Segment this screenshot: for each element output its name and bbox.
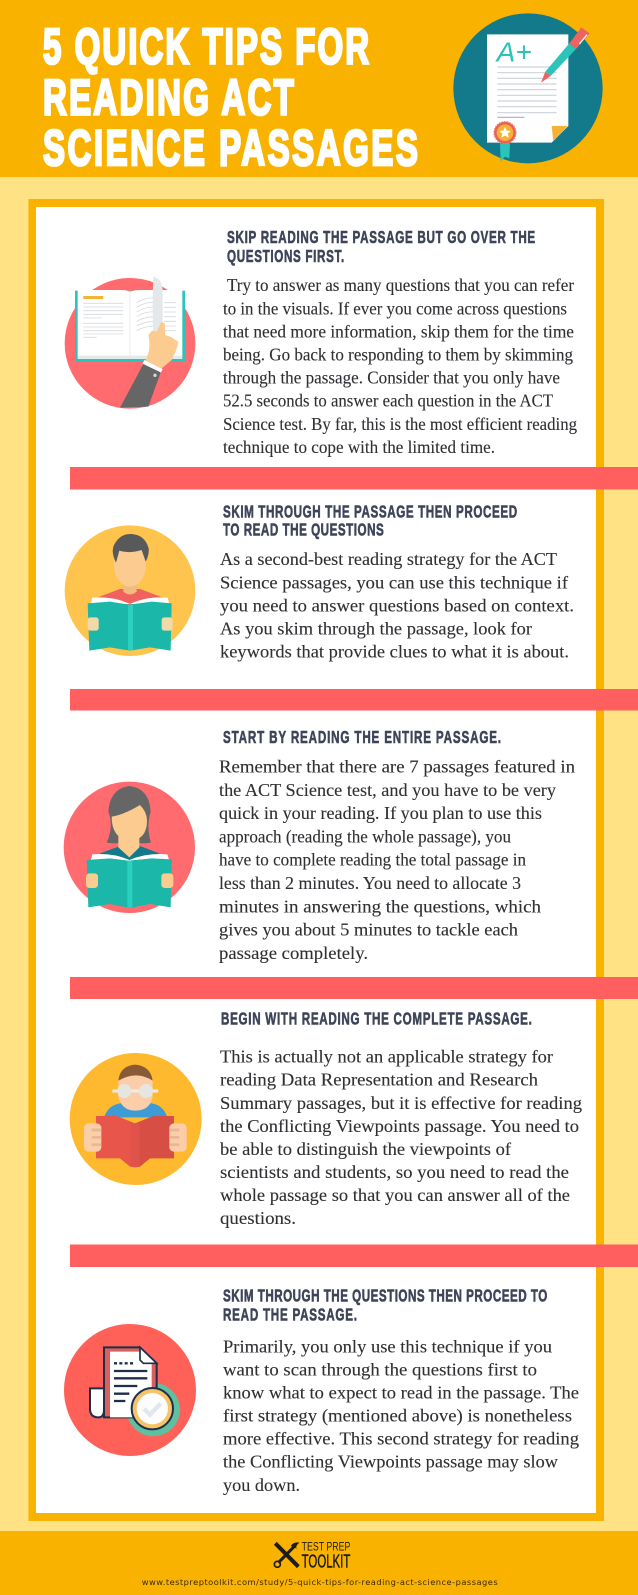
text block: that need more information, skip them for the time bbox=[223, 321, 574, 341]
title bbox=[43, 19, 418, 176]
text block bbox=[219, 756, 575, 963]
title: 5 QUICK TIPS FOR bbox=[43, 19, 369, 74]
panel: tip 3 bbox=[64, 729, 575, 963]
icon: open book with hand bbox=[65, 277, 195, 409]
text block: less than 2 minutes. You need to allocate 3 bbox=[219, 873, 521, 893]
title: SCIENCE PASSAGES bbox=[43, 120, 418, 176]
heading bbox=[223, 504, 517, 540]
header banner bbox=[0, 0, 638, 177]
text block: be able to distinguish the viewpoints of bbox=[220, 1139, 511, 1159]
text block: Try to answer as many questions that you can refer bbox=[227, 275, 574, 295]
icon: graded paper with pencil: A+ bbox=[495, 37, 532, 68]
text block: Remember that there are 7 passages featured in bbox=[219, 756, 575, 776]
text block: first strategy (mentioned above) is nonetheless bbox=[223, 1405, 572, 1425]
panel: tip 4 bbox=[70, 1010, 582, 1228]
heading: READ THE PASSAGE. bbox=[223, 1306, 357, 1325]
content frame bbox=[28, 199, 604, 1521]
icon: document with check badge bbox=[64, 1324, 196, 1456]
text block: being. Go back to responding to them by skimming bbox=[223, 344, 573, 364]
text block: whole passage so that you can answer all of the bbox=[220, 1185, 570, 1205]
text block: As a second-best reading strategy for the ACT bbox=[220, 549, 557, 569]
divider bar 2 bbox=[70, 689, 638, 710]
text block: minutes in answering the questions, which bbox=[219, 896, 541, 916]
icon: person with glasses reading bbox=[70, 1053, 202, 1185]
heading: QUESTIONS FIRST. bbox=[227, 248, 344, 267]
text block: you down. bbox=[223, 1475, 300, 1495]
text block bbox=[223, 1336, 579, 1495]
heading: START BY READING THE ENTIRE PASSAGE. bbox=[223, 729, 501, 748]
panel: tip 1 bbox=[65, 229, 577, 457]
footer bbox=[0, 1531, 638, 1595]
text block: scientists and students, so you need to read the bbox=[220, 1162, 569, 1182]
text block: Summary passages, but it is effective for reading bbox=[220, 1093, 582, 1113]
icon: woman reading bbox=[64, 782, 195, 913]
icon: man reading bbox=[65, 525, 195, 656]
panel: tip 5 bbox=[64, 1287, 579, 1495]
source URL: www.testpreptoolkit.com/study/5-quick-tips-for-reading-act-science-passages bbox=[142, 1577, 498, 1587]
text block: the Conflicting Viewpoints passage. You need to bbox=[220, 1116, 579, 1136]
panel: tip 2 bbox=[65, 504, 574, 661]
text block: questions. bbox=[220, 1208, 296, 1228]
logo: Test Prep Toolkit: TOOLKIT bbox=[302, 1550, 350, 1571]
text block bbox=[223, 275, 577, 457]
heading: SKIP READING THE PASSAGE BUT GO OVER THE bbox=[227, 229, 535, 248]
text block: know what to expect to read in the passage. The bbox=[223, 1382, 579, 1402]
text block: This is actually not an applicable strategy for bbox=[220, 1046, 553, 1066]
heading: SKIM THROUGH THE PASSAGE THEN PROCEED bbox=[223, 504, 517, 522]
text block: Science test. By far, this is the most efficient reading bbox=[223, 414, 577, 434]
divider bar 3 bbox=[70, 977, 638, 999]
text block bbox=[220, 549, 574, 661]
icon: graded paper with pencil bbox=[453, 13, 603, 163]
divider bar 1 bbox=[70, 467, 638, 490]
text block: you need to answer questions based on context. bbox=[220, 595, 574, 615]
text block: have to complete reading the total passage in bbox=[219, 850, 526, 870]
text block: want to scan through the questions first to bbox=[223, 1359, 537, 1379]
title: READING ACT bbox=[43, 70, 294, 125]
text block: quick in your reading. If you plan to use this bbox=[219, 803, 542, 823]
text block: reading Data Representation and Research bbox=[220, 1069, 538, 1089]
heading: TO READ THE QUESTIONS bbox=[223, 522, 384, 540]
heading bbox=[223, 1287, 547, 1325]
text block: Primarily, you only use this technique if you bbox=[223, 1336, 552, 1356]
text block: technique to cope with the limited time. bbox=[223, 437, 495, 457]
heading: BEGIN WITH READING THE COMPLETE PASSAGE. bbox=[221, 1010, 532, 1029]
text block: keywords that provide clues to what it is about. bbox=[220, 641, 569, 661]
text block bbox=[220, 1046, 582, 1228]
text block: passage completely. bbox=[219, 943, 368, 963]
text block: gives you about 5 minutes to tackle each bbox=[219, 920, 518, 940]
divider bar 4 bbox=[70, 1244, 638, 1267]
text block: through the passage. Consider that you only have bbox=[223, 368, 560, 388]
text block: Science passages, you can use this technique if bbox=[220, 572, 568, 592]
logo: Test Prep Toolkit bbox=[274, 1541, 350, 1571]
logo: Test Prep Toolkit: TEST PREP bbox=[302, 1541, 350, 1554]
text block: the Conflicting Viewpoints passage may slow bbox=[223, 1452, 558, 1472]
text block: the ACT Science test, and you have to be very bbox=[219, 780, 556, 800]
text block: 52.5 seconds to answer each question in the ACT bbox=[223, 391, 553, 411]
text block: As you skim through the passage, look for bbox=[220, 618, 532, 638]
text block: to in the visuals. If ever you come across questions bbox=[223, 298, 567, 318]
text block: approach (reading the whole passage), you bbox=[219, 826, 511, 846]
heading bbox=[227, 229, 535, 267]
heading: SKIM THROUGH THE QUESTIONS THEN PROCEED TO bbox=[223, 1287, 547, 1306]
text block: more effective. This second strategy for reading bbox=[223, 1429, 579, 1449]
